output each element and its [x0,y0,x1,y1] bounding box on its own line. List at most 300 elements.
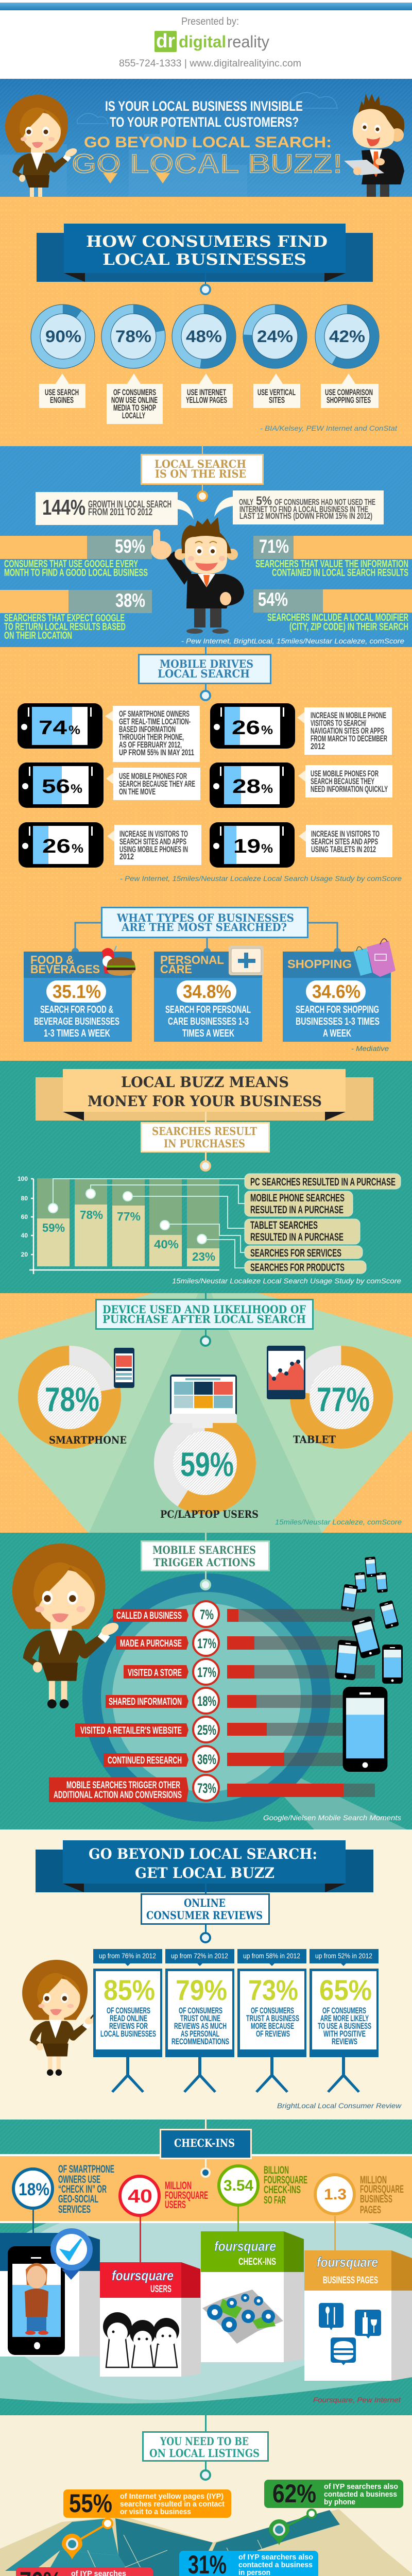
donut: 24%: 24% [257,327,293,346]
donut: 78% [101,304,165,368]
text: real-time location: OF SMARTPHONE OWNERS [119,709,190,719]
map callout: 55%: 55% [69,2489,112,2518]
callout: comparison shopping: SHOPPING SITES [327,395,371,405]
ribbon heading: MONEY FOR YOUR BUSINESS [88,1093,322,1110]
icon: tablet with chart [267,1346,305,1399]
text: on the move: SEARCH BECAUSE THEY ARE [119,779,195,789]
card: food and beverages: SEARCH FOR FOOD & [40,1004,113,1015]
action row: visited a store 17%: VISITED A STORE [128,1668,182,1679]
review board: 73%: MORE BECAUSE [251,2021,294,2031]
logo: digital reality: reality [227,32,269,51]
phone stat: 56% [19,762,104,808]
donut: 90% [31,304,95,368]
card: shopping: SHOPPING [287,957,352,971]
stat: 1.3 million business pages: 1.3 [324,2186,347,2203]
phone stat: 28%: 28 [232,776,261,798]
card: food and beverages: 1-3 TIMES A WEEK [44,1028,110,1039]
map callout: 62%: by phone [324,2498,355,2506]
card: food and beverages [24,946,135,1042]
icon: medical cross tile [229,946,264,975]
phone stat: 19% [210,822,295,868]
action row: made a purchase 17%: MADE A PURCHASE [120,1638,182,1649]
review board: 73%: OF CONSUMERS [251,2006,294,2015]
source note: - BIA/Kelsey, PEW Internet and ConStat [260,424,398,432]
map callout: 55%: searches resulted in a contact [120,2500,225,2509]
panel: device used and likelihood of purchase [0,1293,412,1533]
action row: made a purchase 17% [116,1630,375,1656]
section heading: CONSUMER REVIEWS [146,1909,263,1922]
phone stat: 56%: 56 [42,776,70,798]
source note: - Pew Internet, 15miles/Neustar Localeze Local Search Usage Study by comScore [120,874,402,883]
stat: 1.3 million business pages: MILLION [360,2174,387,2186]
section heading: IS ON THE RISE [155,467,246,480]
logo: digital reality: digital [179,32,226,51]
section heading: MOBILE DRIVES [160,657,253,670]
section heading [96,1299,313,1329]
source note: Google/Nielsen Mobile Search Moments [263,1814,401,1822]
action row: called a business 7% [113,1601,375,1627]
panel: mobile searches trigger actions [0,1533,412,1829]
source note: BrightLocal Local Consumer Review [277,2102,402,2110]
stat: 40 million users: MILLION [165,2180,192,2192]
box: orange foursquare business pages: foursquare [317,2255,378,2270]
review board: 85% [93,1949,162,2093]
section heading: PURCHASE AFTER LOCAL SEARCH [102,1313,306,1326]
ribbon heading: GO BEYOND LOCAL SEARCH: [89,1845,317,1862]
source note: Foursquare, Pew Internet [313,2396,401,2404]
section heading: DEVICE USED AND LIKELIHOOD OF [102,1303,306,1316]
icon: smartphone [114,1348,134,1388]
stat bar: 38% [0,590,152,641]
card: personal care: PERSONAL [160,953,224,967]
stat bar: 38%: TO RETURN LOCAL RESULTS BASED [4,621,126,633]
map callout: 31% in person: contacted a business [238,2561,313,2569]
review board: 79%: OF CONSUMERS [179,2006,222,2015]
phone stat: 19%: % [261,842,273,856]
stat bar: 59% [0,536,152,579]
map callout: 62% [264,2479,403,2545]
stat bar: 71%: 71% [259,536,289,557]
box: red foursquare users [100,2262,200,2377]
stat: 1.3 million business pages [315,2174,404,2251]
donut: smartphone 78% [18,1346,127,1449]
section heading [102,908,308,938]
action row: visited a retailer's website 25%: VISITED A RETAILER'S WEBSITE [80,1725,182,1736]
donut: 24% [243,304,307,368]
action row: called a business 7%: CALLED A BUSINESS [116,1611,182,1621]
box: green foursquare check-ins [201,2231,304,2362]
text: visitors using tablets: USING TABLETS IN 2012 [311,844,376,854]
chart legend: RESULTED IN A PURCHASE [250,1204,344,1216]
text: real-time location [105,706,200,762]
section heading: CHECK-INS [174,2137,235,2149]
action row: called a business 7%: 7% [200,1607,214,1622]
icon: shopping bags [353,939,396,977]
card: shopping: 34.6% [312,981,360,1002]
map callout: 31% in person: of IYP searchers also [238,2553,313,2562]
source note: 15miles/Neustar Localeze Local Search Usage Study by comScore [172,1277,401,1285]
action row: continued research 36% [104,1746,375,1772]
map callout: 55%: of Internet yellow pages (IYP) [120,2492,224,2501]
icon: burger and drink [102,946,135,976]
phone stat: 74% [18,703,102,749]
section heading: IN PURCHASES [164,1137,245,1150]
phone stat: 26% navigation: 26 [232,717,260,739]
stat: 18% smartphone owners: OWNERS USE [58,2174,100,2185]
box: green foursquare check-ins: foursquare [214,2239,276,2254]
stat bar: 38%: ON THEIR LOCATION [4,630,72,641]
stat: 3.54 billion check-ins: CHECK-INS [264,2184,301,2196]
review board: 73%: OF REVIEWS [256,2029,290,2039]
callout: internet yellow pages: USE INTERNET [187,387,226,397]
donut: 48% [172,304,236,368]
bar chart: searches resulting in purchases: 60 [21,1213,28,1221]
icon: blue check badge [50,2228,93,2280]
top header band [0,3,412,10]
stat: 3.54 billion check-ins [219,2164,307,2232]
donut: smartphone 78%: 78% [45,1380,99,1418]
ribbon heading: HOW CONSUMERS FIND [86,233,328,251]
stat bar: 59%: MONTH TO FIND A GOOD LOCAL BUSINESS [4,567,148,579]
review board: 65%: up from 52% in 2012 [315,1952,372,1960]
phone stat: 26% navigation [210,703,295,749]
text: visitors using mobile phones: INCREASE IN VISITORS TO [119,829,188,839]
callout: only 5% [214,490,384,524]
character: woman [5,95,78,206]
map callout: 62%: contacted a business [324,2490,397,2499]
bar chart: searches resulting in purchases: 100 [18,1175,28,1182]
action row: visited a retailer's website 25%: 25% [197,1722,216,1738]
hero headline: GO LOCAL BUZZ! [72,148,343,179]
stat bar: 71% [253,536,412,579]
logo: digital reality [154,30,269,52]
section heading: SEARCHES RESULT [152,1125,257,1138]
icons: larger phones [335,1616,403,1772]
character: pointing man [151,517,244,634]
text: on the move: ON THE MOVE [119,787,156,796]
section heading: TRIGGER ACTIONS [153,1556,255,1569]
section heading: WHAT TYPES OF BUSINESSES [116,911,294,924]
panel: go beyond local search, online consumer reviews [0,1829,412,2120]
donut: 90%: 90% [45,327,81,346]
character: man with tablet [344,94,404,208]
bar chart: searches resulting in purchases: 77% [117,1210,141,1223]
phone stat: 26% mobile visitors: 26 [42,836,71,857]
action row: visited a retailer's website 25% [75,1717,375,1742]
callout: vertical sites: SITES [269,395,285,405]
callout: online media: MEDIA TO SHOP [113,403,156,413]
stat: 1.3 million business pages: PAGES [360,2204,381,2216]
phone stat: 74%: 74 [39,717,67,739]
stat bar: 59%: 59% [115,536,145,557]
donut: pc laptop 59% [154,1412,259,1520]
character: woman [12,1544,121,1708]
callout: 144% growth: 144% [42,495,85,519]
card: personal care: CARE [160,962,192,976]
ribbon heading: LOCAL BUZZ MEANS [121,1074,289,1091]
bar chart: searches resulting in purchases: 59% [42,1221,65,1234]
phone stat: 56%: % [71,782,82,796]
presented by block: Presented by: [181,16,239,27]
icon: laptop [170,1375,237,1428]
callout: 144% growth [36,492,194,525]
stat bar: 38%: SEARCHERS THAT EXPECT GOOGLE [4,613,125,624]
icon: three cartoon kids [103,2312,179,2367]
phone stat: 26% navigation: % [261,723,273,737]
icons: venue tiles [319,2303,381,2365]
callout: online media: LOCALLY [122,411,145,420]
section heading: LOCAL SEARCH [154,457,246,470]
action row: continued research 36%: 36% [197,1752,216,1767]
box: orange foursquare business pages: BUSINESS PAGES [323,2275,378,2286]
review board: 73% [237,1949,306,2093]
section heading: YOU NEED TO BE [160,2435,249,2448]
folded world map [0,2509,412,2576]
section heading: ONLINE [184,1896,226,1909]
review board: 85%: 85% [104,1974,155,2006]
map callout: 62%: of IYP searchers also [324,2482,398,2491]
card: personal care: SEARCH FOR PERSONAL [165,1004,251,1015]
phone stat: 26% mobile visitors: % [72,842,83,856]
hero headline [72,98,343,179]
stat: 40 million users: USERS [165,2199,186,2211]
stat: 3.54 billion check-ins: BILLION [264,2164,289,2176]
callout: use search engines: USE SEARCH [45,387,79,397]
presented by block [119,16,301,69]
review board: 65%: OF CONSUMERS [322,2006,366,2015]
review board: 79% [165,1949,234,2093]
stat bar: 59%: CONSUMERS THAT USE GOOGLE EVERY [4,558,138,570]
donut: tablet 77%: 77% [317,1380,370,1418]
text: real-time location: UP FROM 55% IN MAY 2011 [119,748,194,757]
box: red foursquare users: USERS [150,2284,171,2295]
map callout: 76% [16,2567,153,2576]
phone stat: 74%: % [68,723,80,737]
hero headline: GO BEYOND LOCAL SEARCH: [84,134,332,151]
text: need information quickly [298,765,392,798]
chart legend: RESULTED IN A PURCHASE [250,1231,344,1243]
review board: 79%: AS PERSONAL [181,2029,219,2039]
donut: 48%: 48% [186,327,222,346]
logo: digital reality: dr [156,30,175,52]
review board: 65%: WITH POSITIVE [323,2029,366,2039]
callout: vertical sites: USE VERTICAL [258,387,296,397]
callout: comparison shopping [321,374,379,408]
section heading [141,454,263,484]
review board: 85%: REVIEWS FOR [109,2021,148,2031]
chart legend: SEARCHES FOR SERVICES [250,1247,341,1259]
icon: magnifying glass [82,1573,407,1829]
card: personal care: CARE BUSINESSES 1-3 [168,1016,249,1027]
character: boy on phone screen [25,2263,48,2335]
review board: 65%: ARE MORE LIKELY [320,2013,369,2023]
box: blue smartphone check-in [0,2228,100,2357]
text: search and navigation visitors [297,707,392,755]
stat: 40 million users: FOURSQUARE [165,2190,208,2201]
callout: online media: NOW USE ONLINE [111,395,158,405]
ribbon heading: GET LOCAL BUZZ [135,1865,274,1882]
review board: 79%: up from 72% in 2012 [171,1952,228,1960]
stat bar: 54%: 54% [258,589,288,610]
stat bar: 54% [253,589,412,633]
stat: 3.54 billion check-ins: SO FAR [264,2194,286,2206]
action row: additional action 73% [49,1775,375,1802]
callout: only 5%: ONLY [239,497,253,507]
review board: 73%: up from 58% in 2012 [243,1952,300,1960]
panel: check-ins [0,2120,412,2415]
callout: vertical sites [253,374,300,408]
card: shopping: BUSINESSES 1-3 TIMES [296,1016,380,1027]
card: personal care: 34.8% [183,981,231,1002]
review board: 73%: 73% [248,1974,298,2006]
section heading: MOBILE SEARCHES [152,1544,256,1556]
review board: 85%: up from 76% in 2012 [99,1952,156,1960]
stat: 18% smartphone owners: “CHECK IN” OR [58,2183,107,2195]
hero headline: IS YOUR LOCAL BUSINESS INVISIBLE [105,98,303,114]
action row: shared information 18% [106,1688,375,1714]
review board: 65%: 65% [319,1974,372,2006]
donut: pc laptop 59%: PC/LAPTOP USERS [160,1508,259,1520]
callout: use search engines: ENGINES [50,395,74,405]
text: visitors using mobile phones [107,825,201,865]
text: on the move: USE MOBILE PHONES FOR [119,771,187,781]
text: visitors using tablets [299,825,392,857]
text: search and navigation visitors: VISITORS TO SEARCH/ [311,718,366,728]
ribbon heading [37,224,373,282]
section heading [139,654,271,683]
section heading [141,1123,269,1152]
character: woman with pointer [22,1960,107,2076]
stat: 18% smartphone owners: 18% [19,2180,49,2199]
callout: use search engines [39,374,85,408]
chart legend: MOBILE PHONE SEARCHES [250,1192,345,1204]
review board: 85%: OF CONSUMERS [107,2006,150,2015]
bar chart: searches resulting in purchases: 20 [21,1251,28,1258]
text: real-time location: THROUGH THEIR PHONE, [119,732,184,742]
callout: only 5%: 5% [256,494,272,508]
panel: you need to be on local listings [0,2415,412,2576]
donut: 78%: 78% [115,327,151,346]
map callout: 55% [62,2489,231,2560]
phone stat: 28%: % [261,782,273,796]
donut: pc laptop 59%: 59% [180,1445,234,1483]
text: visitors using mobile phones: 2012 [119,852,134,861]
panel: how consumers find local businesses [0,197,412,446]
card: food and beverages: FOOD & [30,953,74,967]
donut: tablet 77% [290,1346,393,1449]
donut: 42%: 42% [329,327,365,346]
panel: mobile drives local search [0,647,412,1061]
box: green foursquare check-ins: CHECK-INS [238,2257,276,2267]
text: search and navigation visitors: 2012 [311,741,325,751]
panel: local buzz means money [0,1061,412,1293]
text: real-time location: AS OF FEBRUARY 2012, [119,740,182,750]
section heading [161,2130,251,2159]
action row: shared information 18%: 18% [197,1693,216,1709]
review board: 79%: RECOMMENDATIONS [171,2037,229,2046]
review board: 65% [310,1949,379,2093]
panel: local search is on the rise [0,446,412,647]
card: food and beverages: BEVERAGES [30,962,100,976]
review board: 65%: TO USE A BUSINESS [318,2021,371,2031]
stat: 3.54 billion check-ins: 3.54 [224,2177,253,2194]
phone stat: 19%: 19 [233,836,261,857]
text: visitors using mobile phones: USING MOBILE PHONES IN [119,844,188,854]
stat: 18% smartphone owners [13,2163,114,2233]
hero panel [0,79,412,208]
box: red foursquare users: foursquare [112,2268,174,2283]
review board: 73%: TRUST A BUSINESS [246,2013,299,2023]
hero headline: TO YOUR POTENTIAL CUSTOMERS? [110,114,299,130]
source note: - Pew Internet, BrightLocal, 15miles/Neustar Localeze, comScore [181,637,404,645]
callout: 144% growth: FROM 2011 TO 2012 [88,507,152,518]
chart legend: SEARCHES FOR PRODUCTS [250,1262,345,1274]
section heading [141,1541,269,1570]
bar chart: searches resulting in purchases [18,1175,246,1274]
stat: 18% smartphone owners: SERVICES [58,2204,91,2215]
section heading: ON LOCAL LISTINGS [149,2447,260,2460]
icon: map pins under the letters O [103,173,170,183]
text: visitors using mobile phones: SEARCH SITES AND APPS [119,837,186,846]
action row: additional action 73%: 73% [197,1781,216,1796]
action row: continued research 36%: CONTINUED RESEARCH [108,1755,182,1766]
action row: visited a store 17%: 17% [197,1665,216,1680]
ribbon heading [36,1069,373,1121]
review board: 79%: 79% [176,1974,227,2006]
text: real-time location: GET REAL-TIME LOCATION- [119,717,191,726]
bar chart: searches resulting in purchases: 40% [154,1238,179,1251]
action row: additional action 73%: ADDITIONAL ACTION AND CONVERSIONS [54,1790,182,1801]
phone stat: 28% [210,762,295,808]
callout: internet yellow pages [181,374,233,408]
section heading [141,1894,269,1924]
bar chart: searches resulting in purchases: 80 [21,1195,28,1202]
stat: 18% smartphone owners: OF SMARTPHONE [58,2163,114,2175]
review board: 79%: REVIEWS AS MUCH [174,2021,227,2031]
stat: 40 million users: 40 [128,2185,152,2207]
action row: made a purchase 17%: 17% [197,1636,216,1651]
callout: online media: OF CONSUMERS [113,387,156,397]
card: personal care: TIMES A WEEK [182,1028,234,1039]
stat: 3.54 billion check-ins: FOURSQUARE [264,2174,307,2186]
donut: 42% [315,304,379,368]
card: shopping [283,939,396,1042]
bar chart: searches resulting in purchases: 23% [192,1250,215,1263]
chart legend: TABLET SEARCHES [250,1219,318,1231]
icons: scattered phones [340,1556,399,1629]
donut: tablet 77%: TABLET [293,1433,336,1446]
phone stat: 26% mobile visitors [19,822,104,868]
connectors to business cards [75,923,337,951]
bar chart: searches resulting in purchases: 78% [80,1208,103,1222]
card: personal care [154,946,264,1042]
map callout: 62%: 62% [272,2479,316,2508]
source note: 15miles/Neustar Localeze, comScore [275,1518,402,1526]
ribbon heading: LOCAL BUSINESSES [102,251,306,269]
text: real-time location: BASED INFORMATION [119,724,176,734]
chart legend [245,1174,401,1274]
action row: visited a store 17% [124,1659,375,1685]
callout: comparison shopping: USE COMPARISON [325,387,373,397]
callout: internet yellow pages: YELLOW PAGES [186,395,227,405]
review board: 85%: LOCAL BUSINESSES [100,2029,156,2039]
section heading: ARE THE MOST SEARCHED? [121,921,287,934]
map callout: 55%: or visit to a business [120,2507,191,2516]
source note: - Mediative [351,1044,389,1053]
donut: smartphone 78%: SMARTPHONE [49,1434,127,1446]
action row: additional action 73%: MOBILE SEARCHES TRIGGER OTHER [66,1780,180,1791]
callout: 144% growth: GROWTH IN LOCAL SEARCH [88,499,171,510]
